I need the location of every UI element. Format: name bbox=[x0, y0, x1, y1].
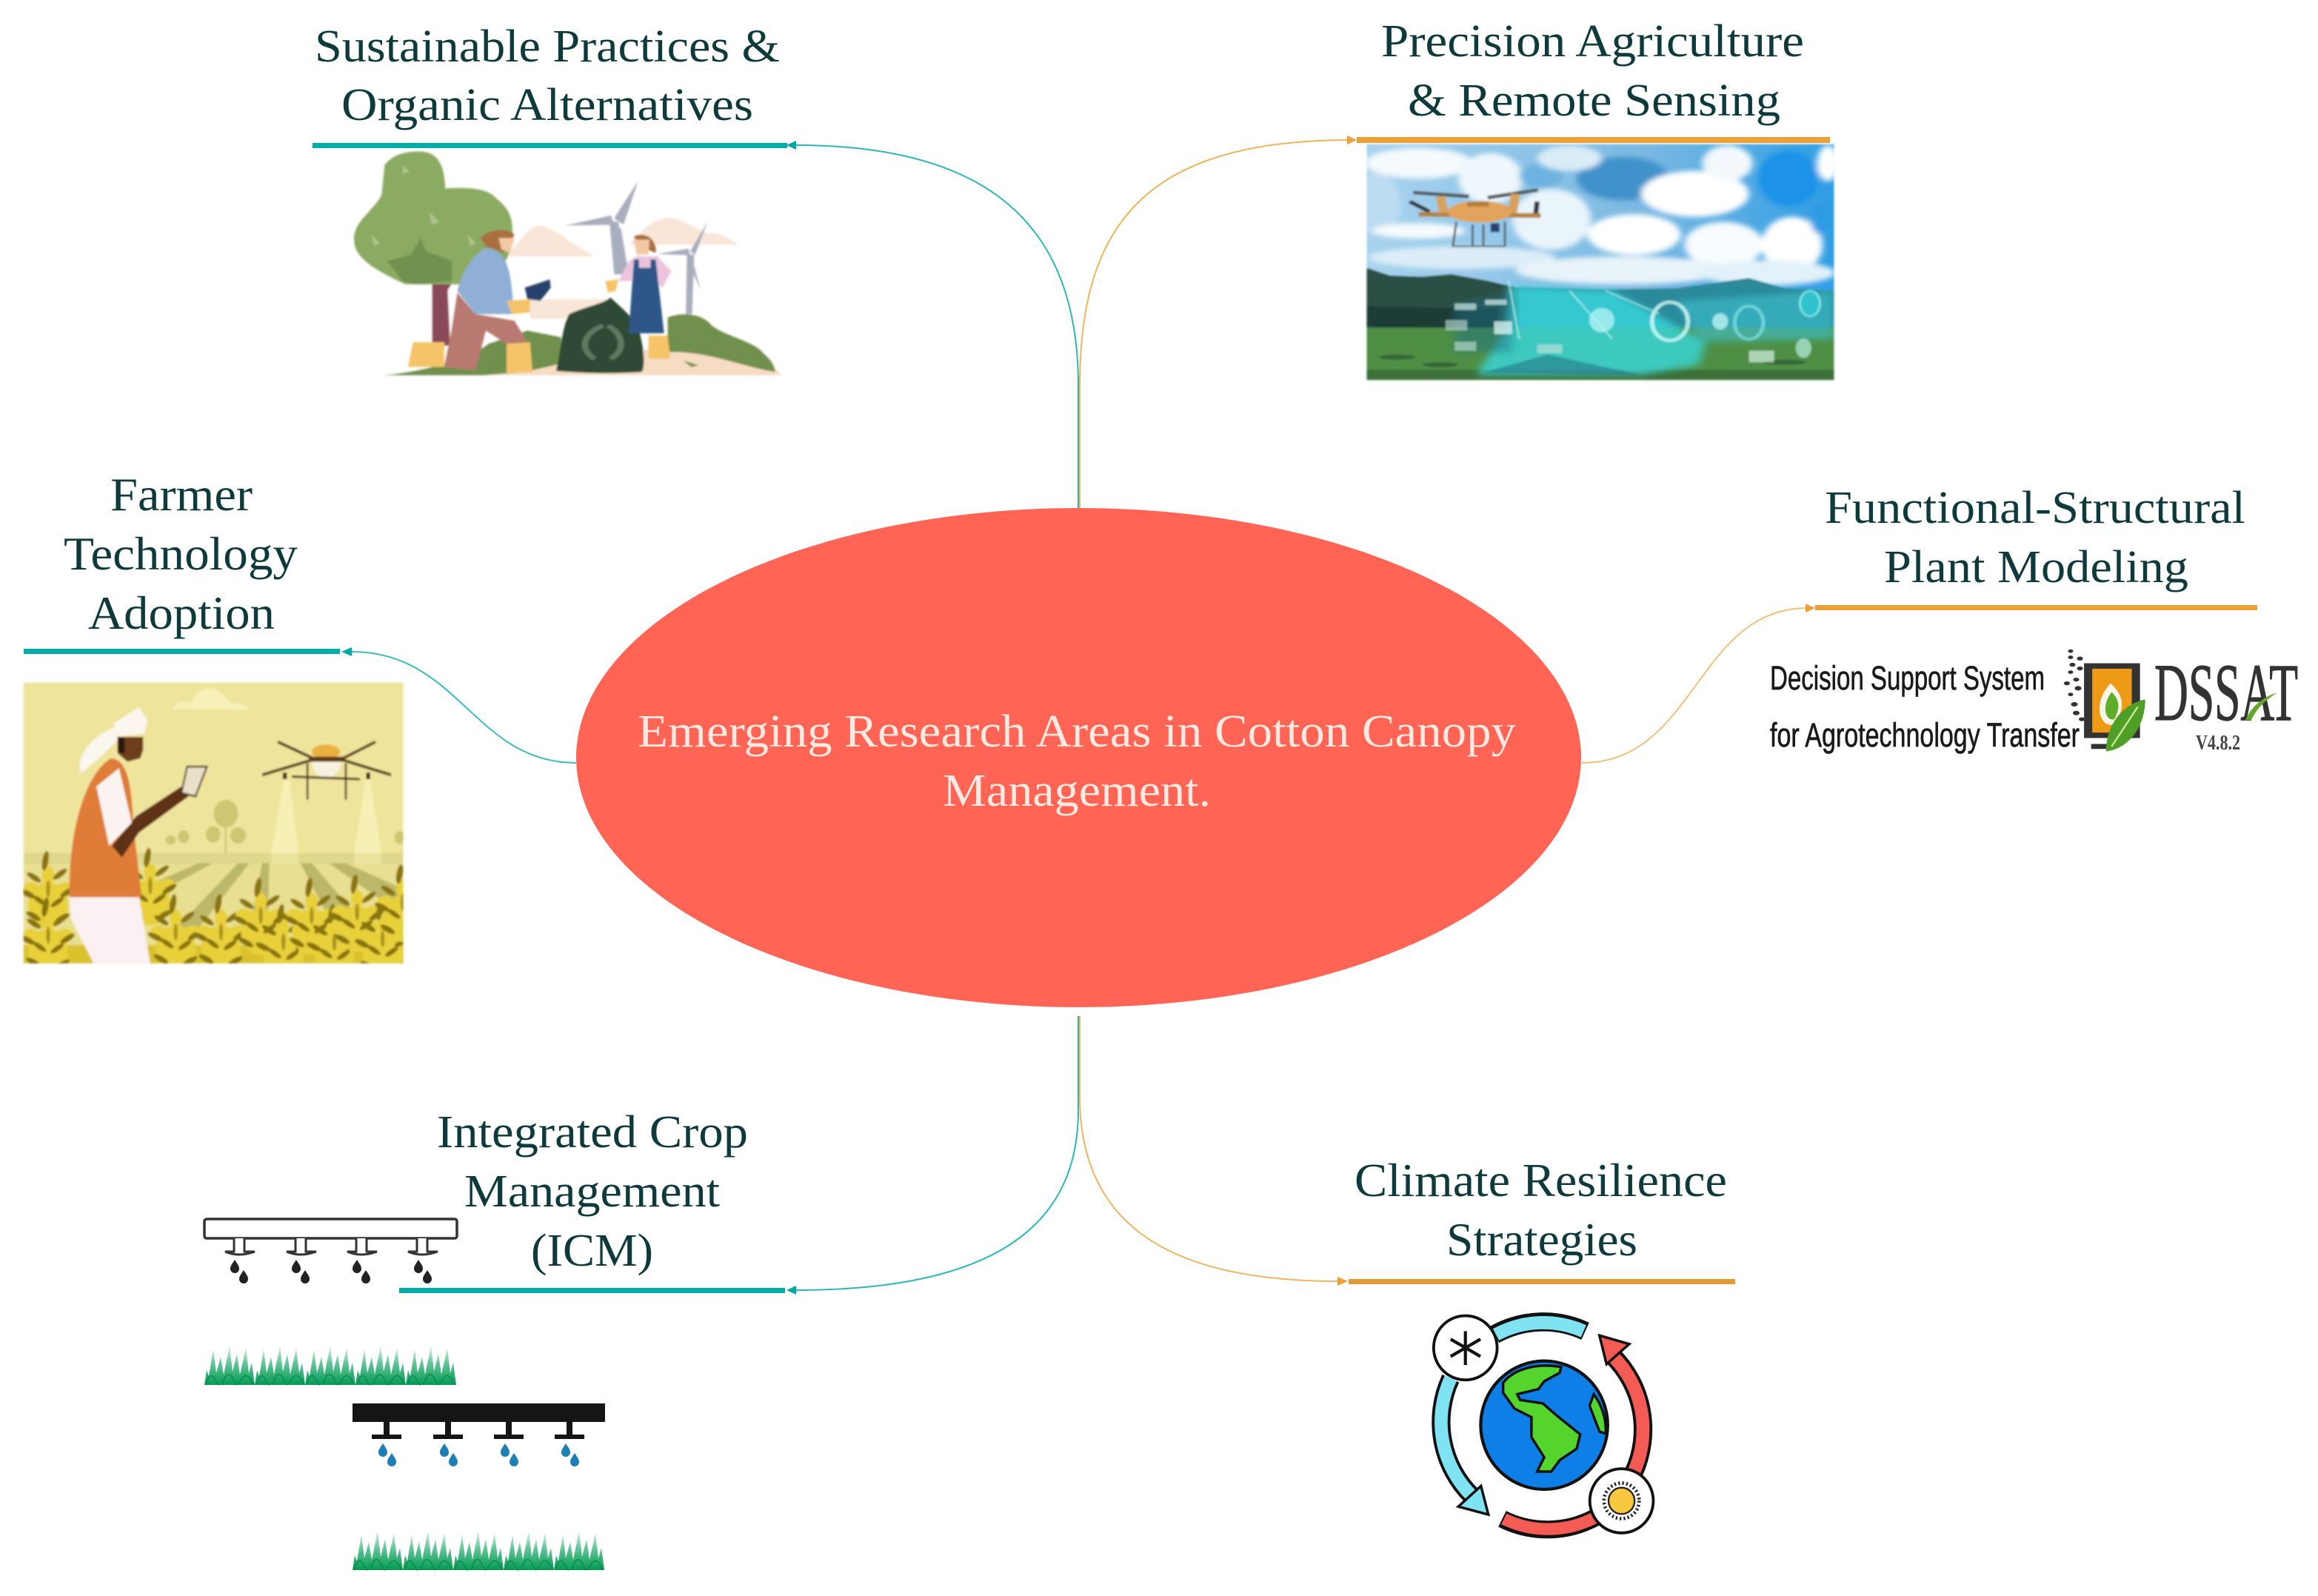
heading: Farmer Technology Adoption: Farmer bbox=[110, 468, 253, 521]
illustration: farmers collecting recycling with wind turbines bbox=[354, 151, 782, 375]
logo: DSSAT decision support system: Decision Support System bbox=[1770, 659, 2045, 697]
heading: Farmer Technology Adoption: Technology bbox=[64, 527, 298, 580]
connector: central node to Climate Resilience Strategies bbox=[1080, 1016, 1348, 1286]
connector: central node to Functional-Structural Plant Modeling bbox=[1582, 604, 1815, 763]
central ellipse with title: Emerging Research Areas in Cotton Canopy bbox=[638, 707, 1516, 757]
rule: Precision Agriculture bbox=[1357, 137, 1830, 143]
heading: Integrated Crop Management (ICM): Integrated Crop bbox=[437, 1107, 748, 1158]
heading: Functional-Structural Plant Modeling: Functional-Structural bbox=[1825, 483, 2245, 533]
connector: central node to Sustainable Practices bbox=[786, 141, 1078, 508]
icon: quadcopter drone bbox=[1410, 190, 1541, 246]
heading: Climate Resilience Strategies bbox=[1355, 1154, 1727, 1266]
heading: Farmer Technology Adoption: Adoption bbox=[88, 587, 275, 639]
diagram: overhead irrigation boom, outline bbox=[204, 1219, 457, 1283]
icon: spraying drone bbox=[262, 742, 391, 800]
connector: central node to Integrated Crop Management bbox=[786, 1016, 1078, 1295]
heading: Functional-Structural Plant Modeling: Plant Modeling bbox=[1884, 542, 2188, 592]
heading: Sustainable Practices & Organic Alternatives: Sustainable Practices & bbox=[315, 21, 780, 72]
heading: Precision Agriculture & Remote Sensing: & Remote Sensing bbox=[1408, 76, 1780, 126]
heading: Integrated Crop Management (ICM): Management bbox=[464, 1166, 720, 1217]
rule: Integrated Crop Management bbox=[399, 1288, 785, 1293]
icon: grass row, lower bbox=[353, 1531, 604, 1570]
icon: globe with climate cycle arrows bbox=[1434, 1316, 1653, 1533]
connector: central node to Farmer Technology Adoption bbox=[341, 647, 576, 763]
heading: Precision Agriculture & Remote Sensing: Precision Agriculture bbox=[1381, 16, 1804, 67]
heading: Sustainable Practices & Organic Alternatives bbox=[315, 21, 780, 130]
illustration: farmer with tablet and spraying drone bbox=[22, 681, 405, 965]
icon: grass row, upper bbox=[204, 1346, 456, 1385]
logo: DSSAT decision support system: for Agrotechnology Transfer bbox=[1770, 716, 2080, 754]
rule: Farmer Technology Adoption bbox=[24, 649, 340, 654]
logo: DSSAT decision support system: V4.8.2 bbox=[2196, 732, 2240, 755]
heading: Integrated Crop Management (ICM) bbox=[437, 1107, 748, 1276]
rule: Sustainable Practices bbox=[313, 143, 787, 148]
heading: Climate Resilience Strategies: Strategies bbox=[1446, 1213, 1637, 1266]
heading: Integrated Crop Management (ICM): (ICM) bbox=[531, 1226, 653, 1276]
heading: Functional-Structural Plant Modeling bbox=[1825, 483, 2245, 592]
connector: central node to Precision Agriculture bbox=[1080, 136, 1357, 508]
heading: Climate Resilience Strategies: Climate Resilience bbox=[1355, 1154, 1727, 1206]
rule: Functional-Structural bbox=[1815, 605, 2257, 610]
logo: DSSAT decision support system bbox=[1770, 647, 2298, 755]
rule: Climate Resilience bbox=[1349, 1279, 1735, 1284]
central ellipse with title: Management. bbox=[943, 766, 1211, 816]
figure: farmer holding tablet bbox=[70, 707, 207, 964]
heading: Farmer Technology Adoption bbox=[64, 468, 298, 639]
image: drone over field with digital overlay bbox=[1351, 144, 1839, 380]
central ellipse with title bbox=[576, 508, 1581, 1007]
diagram: overhead irrigation boom, solid bbox=[353, 1403, 605, 1466]
heading: Sustainable Practices & Organic Alternatives: Organic Alternatives bbox=[341, 80, 753, 130]
heading: Precision Agriculture & Remote Sensing bbox=[1381, 16, 1804, 126]
